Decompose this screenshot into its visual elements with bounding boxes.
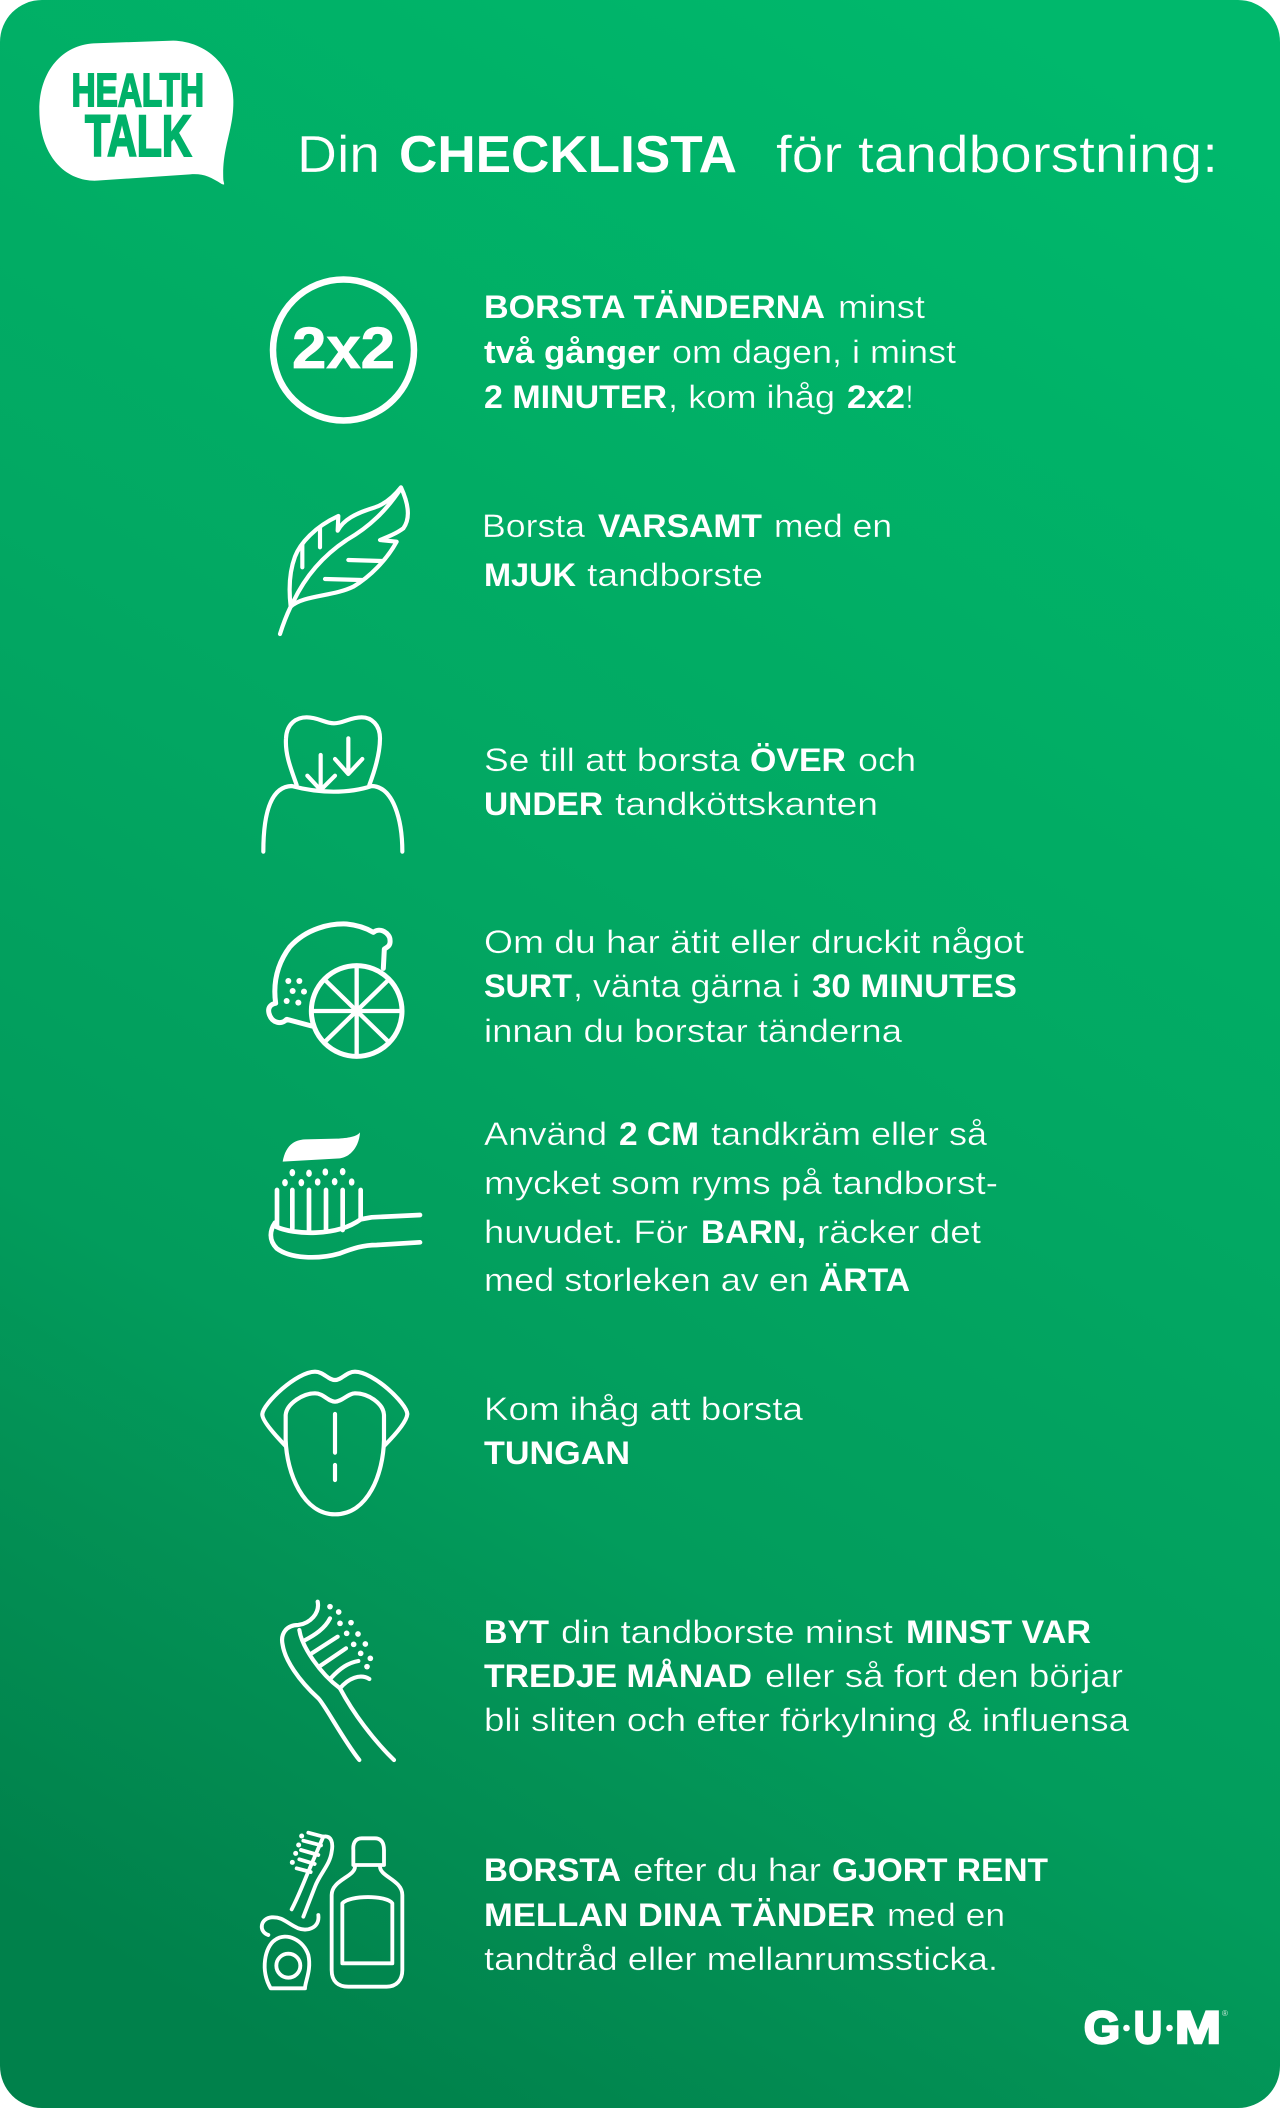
logo: GUM: U xyxy=(1134,2002,1162,2053)
text: toothpaste: huvudet. För xyxy=(484,1214,688,1250)
text: gently: MJUK xyxy=(484,557,576,593)
text: over and under: tandköttskanten xyxy=(615,786,878,822)
logo: Health Talk speech bubble: HEALTH xyxy=(72,64,204,116)
text: replace brush: MINST VAR xyxy=(906,1614,1091,1650)
text: tongue: Kom ihåg att borsta xyxy=(484,1391,803,1427)
icon: 2x2 circle xyxy=(273,280,414,420)
text: replace brush: din tandborste minst xyxy=(561,1614,893,1650)
text: toothpaste: BARN, xyxy=(701,1214,806,1250)
icon: worn toothbrush xyxy=(282,1602,394,1760)
logo: Health Talk speech bubble: TALK xyxy=(85,104,192,169)
logo: Health Talk speech bubble xyxy=(39,41,233,185)
text: replace brush: eller så fort den börjar xyxy=(765,1658,1123,1694)
text: acidic: SURT xyxy=(484,968,572,1004)
text: brush twice: om dagen, i minst xyxy=(672,334,956,370)
logo: GUM: ® xyxy=(1222,2009,1228,2018)
text: brush twice: BORSTA TÄNDERNA xyxy=(484,289,825,325)
text: over and under: och xyxy=(858,742,916,778)
text: replace brush: BYT xyxy=(484,1614,549,1650)
item 6: brush the tongue xyxy=(262,1372,812,1514)
icon: floss, brush and mouthwash xyxy=(262,1833,402,1988)
item 1: brush twice a day xyxy=(273,280,965,420)
text: toothpaste: räcker det xyxy=(817,1214,981,1250)
icon: tongue xyxy=(262,1372,407,1514)
text: over and under: ÖVER xyxy=(750,742,846,778)
text: toothpaste: med storleken av en xyxy=(484,1262,809,1298)
text: toothpaste: Använd xyxy=(484,1116,607,1152)
item 7: replace toothbrush xyxy=(282,1602,1132,1760)
text: over and under: UNDER xyxy=(484,786,603,822)
text: replace brush: TREDJE MÅNAD xyxy=(484,1658,752,1694)
text: gently: tandborste xyxy=(587,557,763,593)
icon: 2x2 circle: 2x2 xyxy=(292,316,395,381)
text: brush twice: ! xyxy=(906,379,913,415)
logo: GUM: G xyxy=(1084,2002,1120,2053)
icon: tooth with arrows xyxy=(263,717,402,852)
text: brush twice: minst xyxy=(838,289,925,325)
icon: toothbrush with paste xyxy=(271,1132,420,1257)
title: CHECKLISTA xyxy=(399,126,737,184)
text: between teeth: BORSTA xyxy=(484,1852,621,1888)
text: tongue: TUNGAN xyxy=(484,1435,630,1471)
text: toothpaste: 2 CM xyxy=(619,1116,699,1152)
text: between teeth: med en xyxy=(887,1897,1005,1933)
title: för tandborstning: xyxy=(776,126,1218,184)
text: acidic: innan du borstar tänderna xyxy=(484,1013,902,1049)
text: brush twice: , kom ihåg xyxy=(668,379,835,415)
text: between teeth: efter du har xyxy=(633,1852,821,1888)
text: gently: VARSAMT xyxy=(598,508,762,544)
text: brush twice: 2 MINUTER xyxy=(484,379,667,415)
text: brush twice: 2x2 xyxy=(847,379,905,415)
logo dots xyxy=(1123,2025,1173,2031)
text: acidic: 30 MINUTES xyxy=(812,968,1017,1004)
icon: lemon xyxy=(269,924,402,1056)
item 5: toothpaste amount xyxy=(271,1116,1007,1298)
text: over and under: Se till att borsta xyxy=(484,742,740,778)
text: toothpaste: mycket som ryms på tandborst- xyxy=(484,1165,998,1201)
text: gently: Borsta xyxy=(482,508,585,544)
text: acidic: Om du har ätit eller druckit något xyxy=(484,924,1024,960)
text: toothpaste: tandkräm eller så xyxy=(711,1116,987,1152)
logo: GUM: M xyxy=(1175,2002,1221,2053)
text: acidic: , vänta gärna i xyxy=(573,968,800,1004)
icon: feather xyxy=(280,487,408,634)
text: gently: med en xyxy=(774,508,892,544)
item 2: gentle, soft brush xyxy=(280,487,901,634)
text: toothpaste: ÄRTA xyxy=(819,1262,910,1298)
item 4: wait after acidic food xyxy=(269,924,1033,1056)
text: between teeth: MELLAN DINA TÄNDER xyxy=(484,1897,875,1933)
text: brush twice: två gånger xyxy=(484,334,660,370)
text: replace brush: bli sliten och efter förkylning & influensa xyxy=(484,1702,1129,1738)
item 8: clean between teeth xyxy=(262,1833,1057,1988)
text: between teeth: GJORT RENT xyxy=(832,1852,1048,1888)
title: Din xyxy=(297,126,380,184)
text: between teeth: tandtråd eller mellanrumssticka. xyxy=(484,1941,998,1977)
item 3: over and under gum line xyxy=(263,717,925,852)
